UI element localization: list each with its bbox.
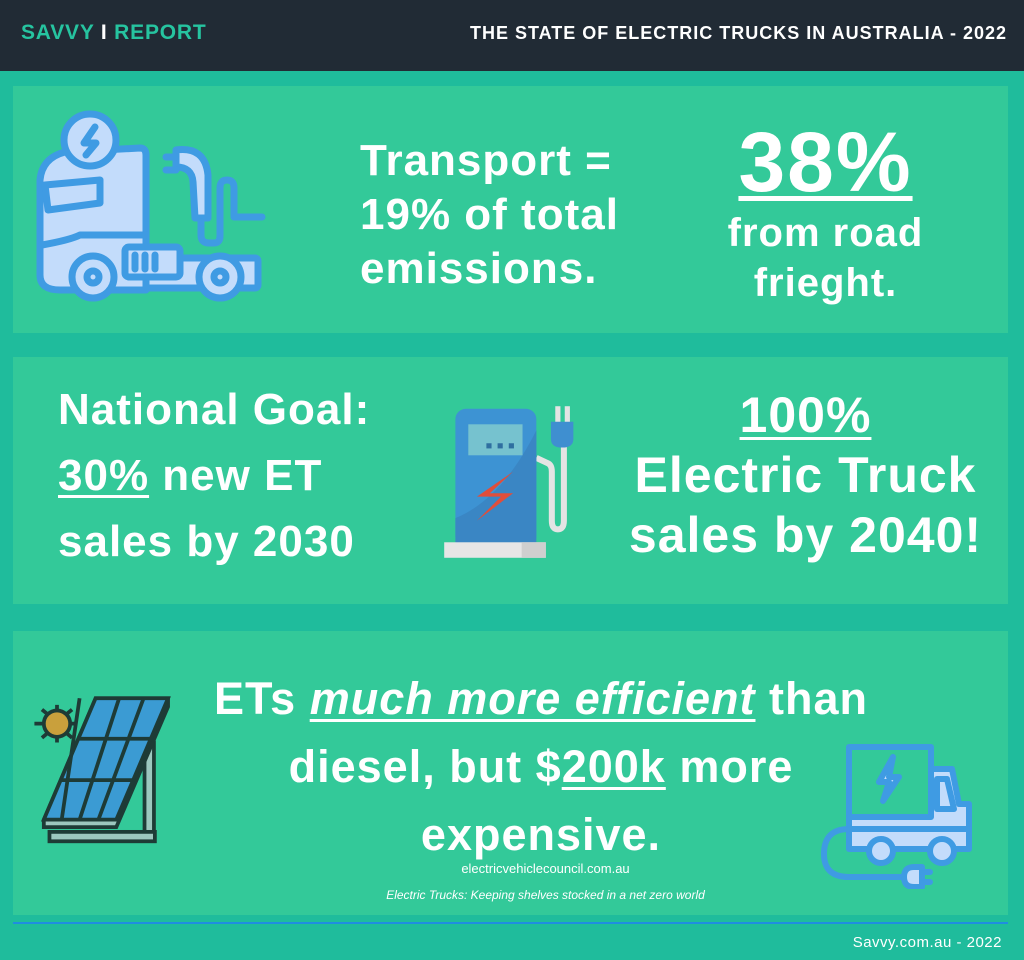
icon: electric delivery truck: [821, 744, 972, 889]
text: transport share: emissions.: [360, 244, 597, 293]
icon: solar panel with sun: [34, 696, 171, 844]
panel: transport emissions: [13, 86, 1008, 333]
panel: national goal: [13, 357, 1008, 604]
icon: electric truck with charger: [36, 110, 266, 302]
stat: 38% road freight: frieght.: [754, 261, 897, 305]
stat: 38% road freight: [728, 115, 923, 305]
text: transport share: Transport =: [360, 136, 612, 185]
text: efficiency statement: diesel, but $200k more: [289, 741, 793, 792]
icon: charging station: [444, 406, 574, 558]
text: 30% goal: 30% new ET: [58, 451, 322, 500]
text: efficiency statement: expensive.: [421, 809, 661, 860]
text: 30% goal: National Goal:: [58, 385, 370, 434]
header title: THE STATE OF ELECTRIC TRUCKS IN AUSTRALIA - 2022: [470, 23, 1007, 43]
footer credit: Savvy.com.au - 2022: [853, 934, 1002, 951]
stat: 100% by 2040: Electric Truck: [635, 447, 976, 503]
source text: electricvehiclecouncil.com.au: [461, 861, 630, 876]
stat: 100% by 2040: [629, 387, 982, 563]
stat: 100% by 2040: 100%: [740, 387, 871, 443]
text: efficiency statement: [214, 673, 868, 860]
divider line: [13, 922, 1008, 924]
header brand: SAVVY I REPORT: [21, 21, 206, 44]
text: 30% goal: sales by 2030: [58, 517, 355, 566]
stat: 100% by 2040: sales by 2040!: [629, 507, 982, 563]
text: transport share: 19% of total: [360, 190, 619, 239]
stat: 38% road freight: 38%: [738, 115, 913, 209]
text: 30% goal: [58, 385, 370, 566]
header bar: [0, 0, 1024, 71]
stat: 38% road freight: from road: [728, 211, 923, 255]
text: transport share: [360, 136, 619, 293]
panel: efficiency and cost: [13, 631, 1008, 915]
source caption: Electric Trucks: Keeping shelves stocked in a net zero world: [386, 888, 705, 902]
text: efficiency statement: ETs much more efficient than: [214, 673, 868, 724]
